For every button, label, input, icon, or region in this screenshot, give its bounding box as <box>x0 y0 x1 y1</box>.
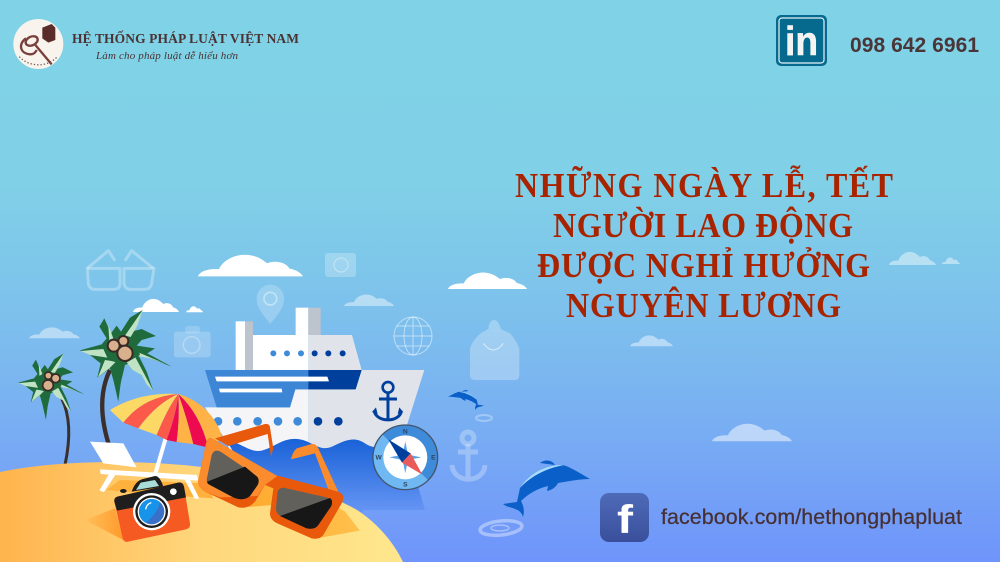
title: NHỮNG NGÀY LỄ, TẾT <box>515 165 893 205</box>
sunglasses group <box>198 424 360 539</box>
icon: linkedin: in <box>785 18 818 64</box>
camera and beach chair <box>85 442 213 542</box>
icon: faded anchor <box>452 432 485 481</box>
icon: compass: N <box>403 428 408 435</box>
island sand <box>0 462 403 562</box>
title: ĐƯỢC NGHỈ HƯỞNG <box>537 246 870 285</box>
small dolphin <box>448 390 484 410</box>
facebook address: facebook.com/hethongphapluat <box>661 505 962 529</box>
camera <box>114 476 190 542</box>
header logo <box>13 19 63 69</box>
palm tree left <box>18 354 84 465</box>
ship hull <box>205 370 424 453</box>
big ripple <box>479 519 523 537</box>
title: NGƯỜI LAO ĐỘNG <box>553 206 853 245</box>
sunglasses and compass <box>198 424 438 539</box>
icon: faded camera top <box>325 253 356 277</box>
icon: linkedin <box>776 15 827 66</box>
sunglasses shadow <box>243 485 360 538</box>
header slogan: Làm cho pháp luật dễ hiểu hơn <box>95 50 238 62</box>
icon: faded globe <box>394 317 432 355</box>
icon: faded camera <box>174 326 211 357</box>
icon: compass: S <box>403 482 408 489</box>
title <box>515 165 893 325</box>
palm trees <box>18 310 172 465</box>
beach chair <box>90 442 213 499</box>
icon: facebook <box>600 493 649 542</box>
palm tree right <box>80 310 172 448</box>
icon: faded glasses <box>87 251 154 289</box>
icon: compass: E <box>431 455 436 462</box>
clouds <box>29 252 960 441</box>
big dolphin <box>503 461 590 517</box>
icon: facebook: f <box>617 498 634 542</box>
title: NGUYÊN LƯƠNG <box>566 286 841 325</box>
ship upper deck <box>253 335 362 370</box>
umbrella pole <box>155 438 166 475</box>
beach scene <box>87 251 223 475</box>
header organisation name: HỆ THỐNG PHÁP LUẬT VIỆT NAM <box>72 31 299 46</box>
icon: faded shopping bag <box>470 320 519 380</box>
small ripple <box>476 415 492 421</box>
phone number: 098 642 6961 <box>850 34 979 57</box>
icon: compass <box>361 425 438 502</box>
icon: ship anchor <box>372 382 403 420</box>
icon: faded map pin <box>257 285 284 324</box>
camera shadow <box>85 508 123 540</box>
icon: compass: W <box>375 455 382 462</box>
ship illustration <box>205 285 425 520</box>
umbrella canopy <box>110 394 223 448</box>
sunglasses frame <box>198 438 343 539</box>
water waves <box>227 437 425 520</box>
sunglasses lenses <box>207 451 332 529</box>
sunglasses temples <box>215 424 338 492</box>
ship funnels <box>236 308 321 370</box>
